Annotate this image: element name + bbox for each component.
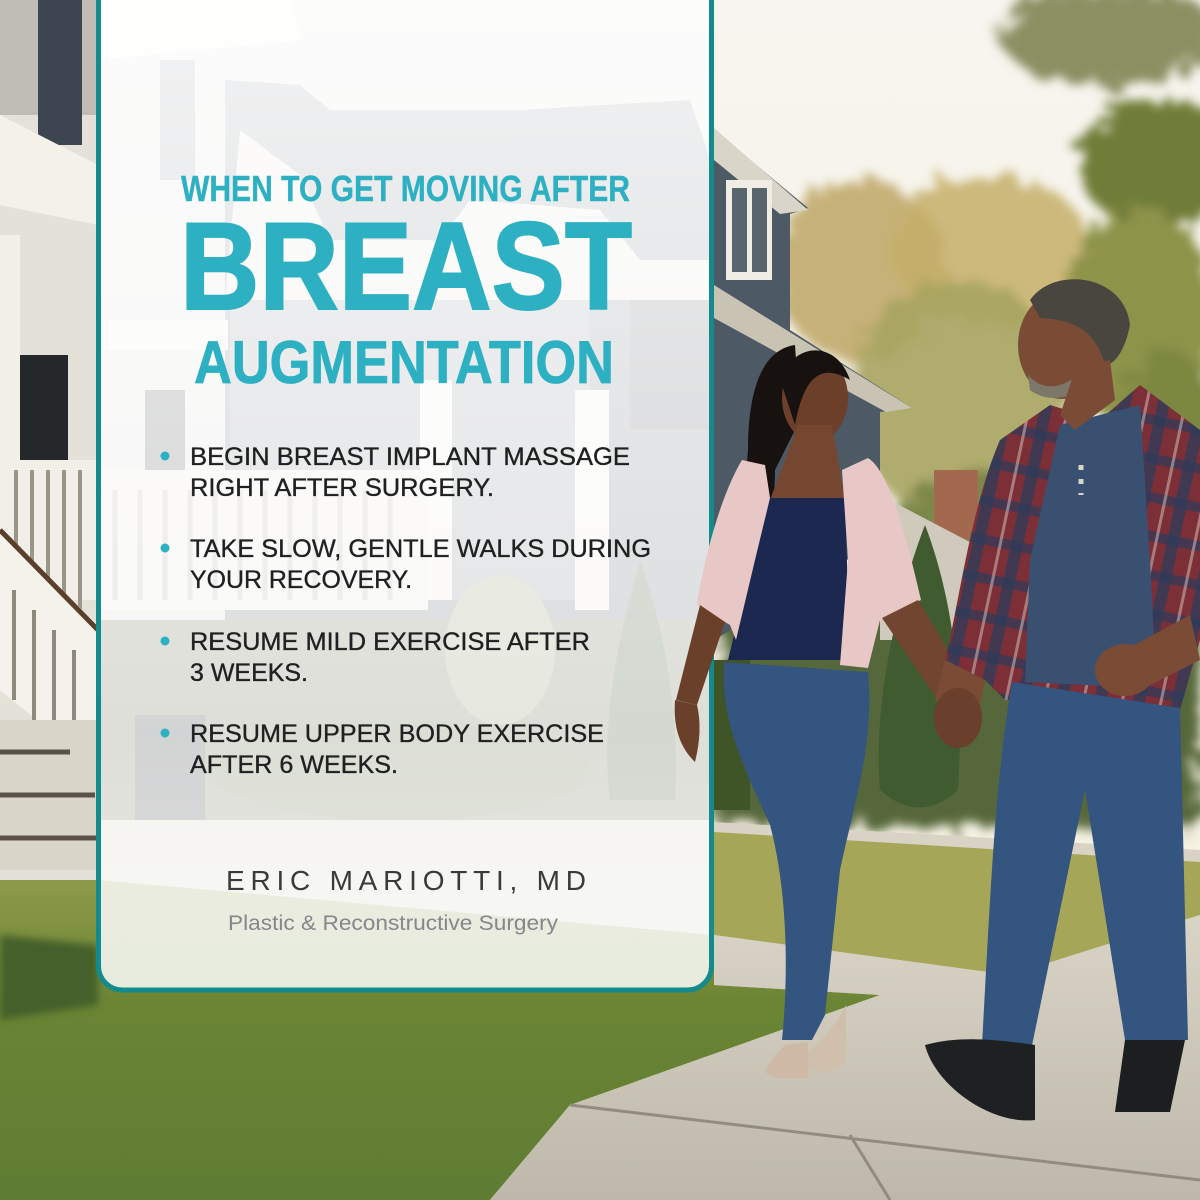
arm and hand: [935, 660, 985, 730]
bullet 3: [160, 628, 590, 687]
jeans: [724, 662, 869, 1040]
title: WHEN TO GET MOVING AFTER: [181, 168, 630, 209]
hedge tree: [879, 525, 960, 808]
left house seen outside panel: [0, 0, 98, 880]
title: BREAST: [180, 198, 632, 336]
head: [1018, 291, 1106, 399]
bullet 2: TAKE SLOW, GENTLE WALKS DURING: [190, 535, 651, 563]
shirt: [945, 385, 1200, 710]
right house: [714, 130, 912, 640]
flats: [765, 1042, 808, 1078]
bullet 2: YOUR RECOVERY.: [190, 566, 412, 594]
ghost house behind panel: [98, 0, 714, 940]
bullet 3: RESUME MILD EXERCISE AFTER: [190, 628, 590, 656]
bullet 4: RESUME UPPER BODY EXERCISE: [190, 720, 604, 748]
bullet list: [160, 443, 651, 779]
trees: [716, 0, 1200, 825]
panel: translucent card: [98, 0, 712, 990]
bullet 2: [160, 535, 651, 594]
shoes: [925, 1039, 1035, 1120]
neck and chest: [770, 425, 845, 500]
logo: practice name: Plastic & Reconstructive Surgery: [228, 912, 559, 935]
bullet 3: 3 WEEKS.: [190, 659, 308, 687]
logo: practice name: [226, 865, 586, 935]
henley buttons: [1078, 465, 1084, 495]
jeans: [982, 682, 1188, 1055]
head: [782, 354, 848, 442]
top: [728, 498, 850, 660]
bullet 1: RIGHT AFTER SURGERY.: [190, 474, 494, 502]
logo: practice name: ERIC MARIOTTI, MD: [226, 865, 586, 896]
arms: [676, 605, 725, 705]
title: AUGMENTATION: [194, 329, 614, 396]
bullet 4: [160, 720, 604, 779]
man walking: [925, 279, 1200, 1120]
tee: [1025, 405, 1155, 688]
cardigan: [697, 458, 921, 668]
bullet 1: [160, 443, 630, 502]
title: [180, 168, 632, 396]
hair: [728, 345, 800, 620]
bullet 4: AFTER 6 WEEKS.: [190, 751, 398, 779]
bullet 1: BEGIN BREAST IMPLANT MASSAGE: [190, 443, 630, 471]
woman walking: [675, 345, 975, 1078]
lawn and path: [714, 822, 1200, 1200]
